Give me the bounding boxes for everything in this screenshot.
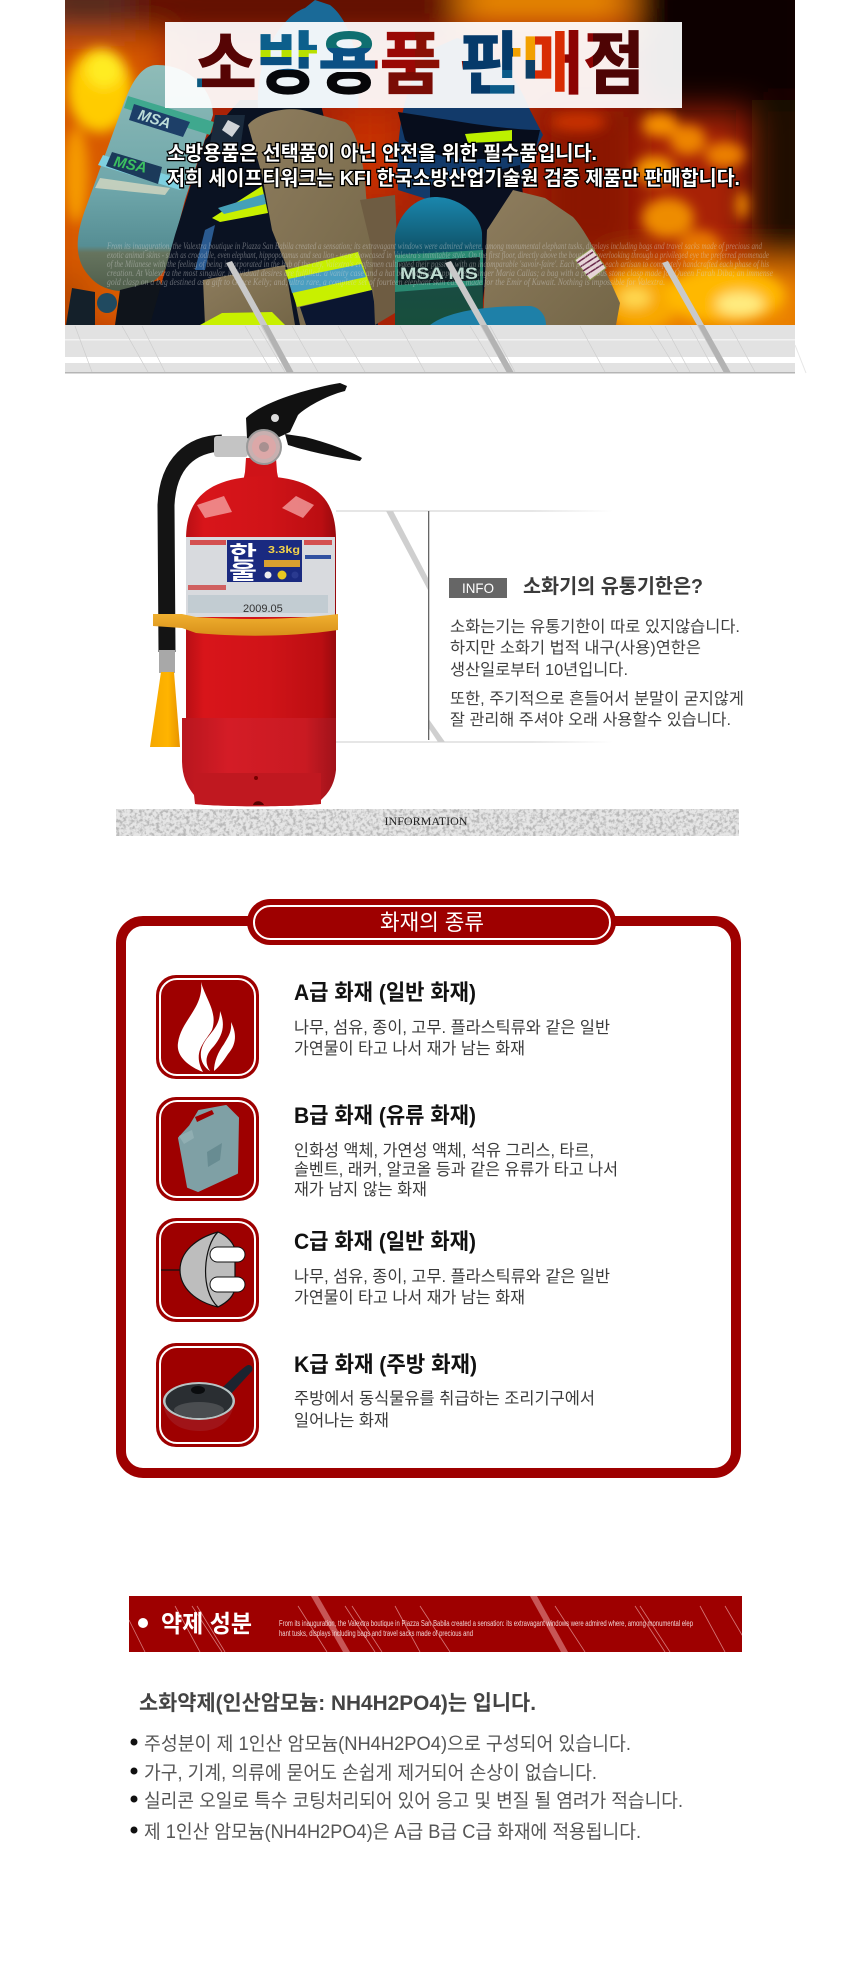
- info body: 생산일로부터 10년입니다.: [450, 661, 628, 679]
- class A text: [294, 980, 610, 1058]
- fire background photo: [65, 0, 795, 325]
- left air tank: [78, 65, 213, 291]
- highlights: [197, 496, 232, 518]
- info body: 또한, 주기적으로 흔들어서 분말이 굳지않게: [450, 690, 744, 708]
- hose: [166, 443, 222, 652]
- flag patch: [575, 248, 606, 280]
- icon: class C electric plug: [156, 1218, 259, 1322]
- title box: [165, 22, 682, 108]
- panel: types of fire: [121, 899, 736, 1473]
- info text block: [449, 575, 744, 729]
- class A text: 가연물이 타고 나서 재가 남는 화재: [294, 1039, 525, 1058]
- ingredients bullet list: 제 1인산 암모늄(NH4H2PO4)은 A급 B급 C급 화재에 적용됩니다.: [144, 1821, 641, 1843]
- fire extinguisher: 한: [229, 542, 257, 565]
- class C text: 가연물이 타고 나서 재가 남는 화재: [294, 1288, 525, 1307]
- section banner: ingredients: hant tusks, displays including bags and travel sacks made of precious and: [279, 1629, 473, 1638]
- hero banner: firefighters in front of flames: MSA MS: [400, 264, 478, 283]
- left sleeve reflective stripes: [285, 252, 372, 307]
- levers: [246, 383, 347, 445]
- class A text: 나무, 섬유, 종이, 고무. 플라스틱류와 같은 일반: [294, 1018, 610, 1037]
- diagonal gray stripes: [226, 261, 731, 373]
- info heading: 소화기의 유통기한은?: [523, 575, 703, 598]
- ingredients bullet list: 주성분이 제 1인산 암모늄(NH4H2PO4)으로 구성되어 있습니다.: [144, 1733, 631, 1755]
- horn nozzle: [150, 672, 180, 747]
- info body: [450, 618, 744, 729]
- class K text: 일어나는 화재: [294, 1411, 389, 1430]
- fire extinguisher: 울: [229, 562, 257, 584]
- class B text: 재가 남지 않는 화재: [294, 1180, 427, 1199]
- information textured strip: INFORMATION: [384, 814, 468, 828]
- class B text: B급 화재 (유류 화재): [294, 1103, 476, 1128]
- panel tab heading: [247, 899, 616, 945]
- fire extinguisher: [150, 383, 362, 806]
- section banner: ingredients: [129, 1596, 745, 1652]
- right firefighter far shoulder: [360, 195, 400, 325]
- right firefighter collar: [430, 165, 523, 302]
- icon: class B fuel can: [156, 1097, 259, 1201]
- title: 소방용품 판매점: [195, 27, 645, 103]
- fine italic text overlay: gold clasp on a bag destined as a gift to Grace Kelly; and, ultra rare, a complete set of fourteen elephant skin cases made for the Emir of Kuwait. Nothing is impossible for Valextra.: [107, 277, 665, 287]
- class C text: C급 화재 (일반 화재): [294, 1229, 476, 1254]
- class B text: [294, 1103, 618, 1199]
- class A text: A급 화재 (일반 화재): [294, 980, 476, 1005]
- cylinder body: [186, 476, 336, 730]
- info body: 하지만 소화기 법적 내구(사용)연한은: [450, 639, 701, 657]
- icon: class K frying pan: [156, 1343, 259, 1447]
- class B text: 인화성 액체, 가연성 액체, 석유 그리스, 타르,: [294, 1141, 594, 1160]
- class C text: [294, 1229, 610, 1307]
- class K text: 주방에서 동식물유를 취급하는 조리기구에서: [294, 1389, 595, 1408]
- hero subtitle: [167, 142, 740, 190]
- info body: 잘 관리해 주셔야 오래 사용할수 있습니다.: [450, 711, 731, 729]
- class B text: 솔벤트, 래커, 알코올 등과 같은 유류가 타고 나서: [294, 1160, 618, 1179]
- right firefighter coat: [483, 190, 620, 325]
- yellow belt: [153, 614, 338, 636]
- fine italic text overlay: [106, 241, 773, 287]
- panel tab heading: 화재의 종류: [380, 910, 484, 935]
- hero subtitle: 소방용품은 선택품이 아닌 안전을 위한 필수품입니다.: [167, 142, 597, 165]
- hero banner: firefighters in front of flames: [40, 0, 825, 374]
- ingredients bullet list: [130, 1733, 683, 1843]
- left firefighter coat: [248, 109, 378, 325]
- label: [186, 537, 335, 617]
- ingredients bullet list: 실리콘 오일로 특수 코팅처리되어 있어 응고 및 변질 될 염려가 적습니다.: [144, 1790, 683, 1812]
- ingredients heading: 소화약제(인산암모늄: NH4H2PO4)는 입니다.: [139, 1692, 536, 1715]
- ingredients bullet list: 가구, 기계, 의류에 묻어도 손쉽게 제거되어 손상이 없습니다.: [144, 1762, 597, 1784]
- base details: [195, 773, 321, 806]
- class C text: 나무, 섬유, 종이, 고무. 플라스틱류와 같은 일반: [294, 1267, 610, 1286]
- class K text: K급 화재 (주방 화재): [294, 1352, 477, 1377]
- left tank valve: [66, 288, 95, 325]
- right firefighter helmet: [397, 38, 543, 215]
- left firefighter harness: [161, 100, 324, 325]
- skirt: [182, 718, 336, 806]
- gauge: [247, 430, 281, 464]
- blue hose: [430, 306, 546, 325]
- fire extinguisher: 2009.05: [243, 603, 283, 615]
- neck: [243, 458, 279, 482]
- section banner: ingredients: 약제 성분: [161, 1611, 252, 1638]
- hero banner: firefighters in front of flames: MSA: [136, 107, 173, 133]
- hero banner: firefighters in front of flames: MSA: [112, 153, 148, 177]
- class K text: [294, 1352, 595, 1430]
- info badge: INFO: [462, 580, 494, 596]
- fire extinguisher: 3.3kg: [268, 545, 300, 556]
- left firefighter helmet: [258, 0, 359, 108]
- info body: 소화는기는 유통기한이 따로 있지않습니다.: [450, 618, 740, 636]
- information textured strip: [116, 809, 739, 836]
- section banner: ingredients: From its inauguration, the Valextra boutique in Piazza San Babila created a sensation: its extravagant windows were admired where, among monumental elep: [279, 1619, 693, 1628]
- info badge: [449, 578, 507, 598]
- icon: class A flame: [156, 975, 259, 1079]
- right air tank: [395, 197, 483, 325]
- hero subtitle: 저희 세이프티워크는 KFI 한국소방산업기술원 검증 제품만 판매합니다.: [167, 167, 740, 190]
- gray band below hero: [65, 325, 806, 374]
- info lines and divider: [336, 510, 613, 742]
